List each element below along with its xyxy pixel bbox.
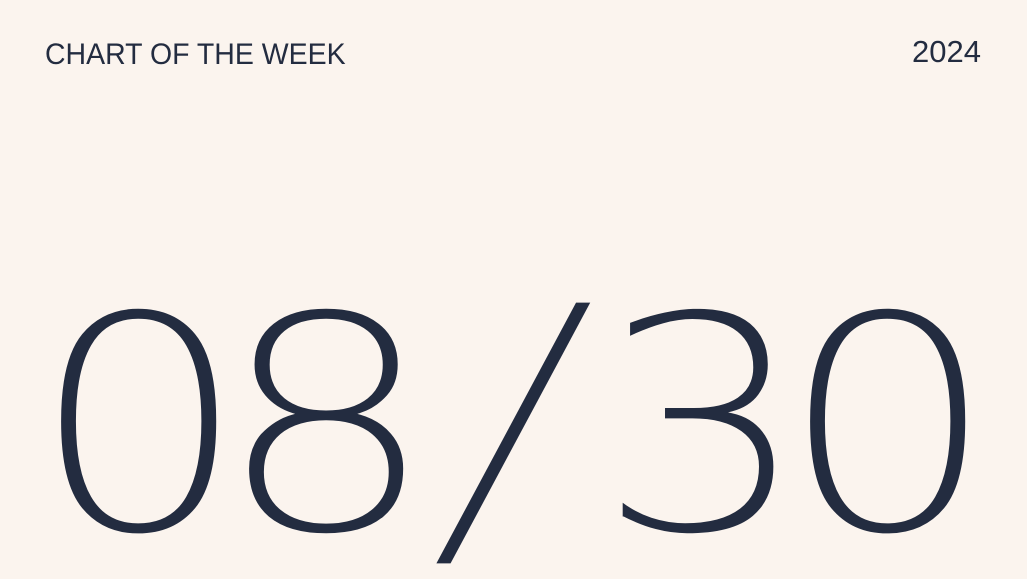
heading: chart of the week: CHART OF THE WEEK <box>45 38 346 71</box>
year label: 2024 <box>912 34 981 69</box>
large date: 08/30 <box>29 283 999 565</box>
